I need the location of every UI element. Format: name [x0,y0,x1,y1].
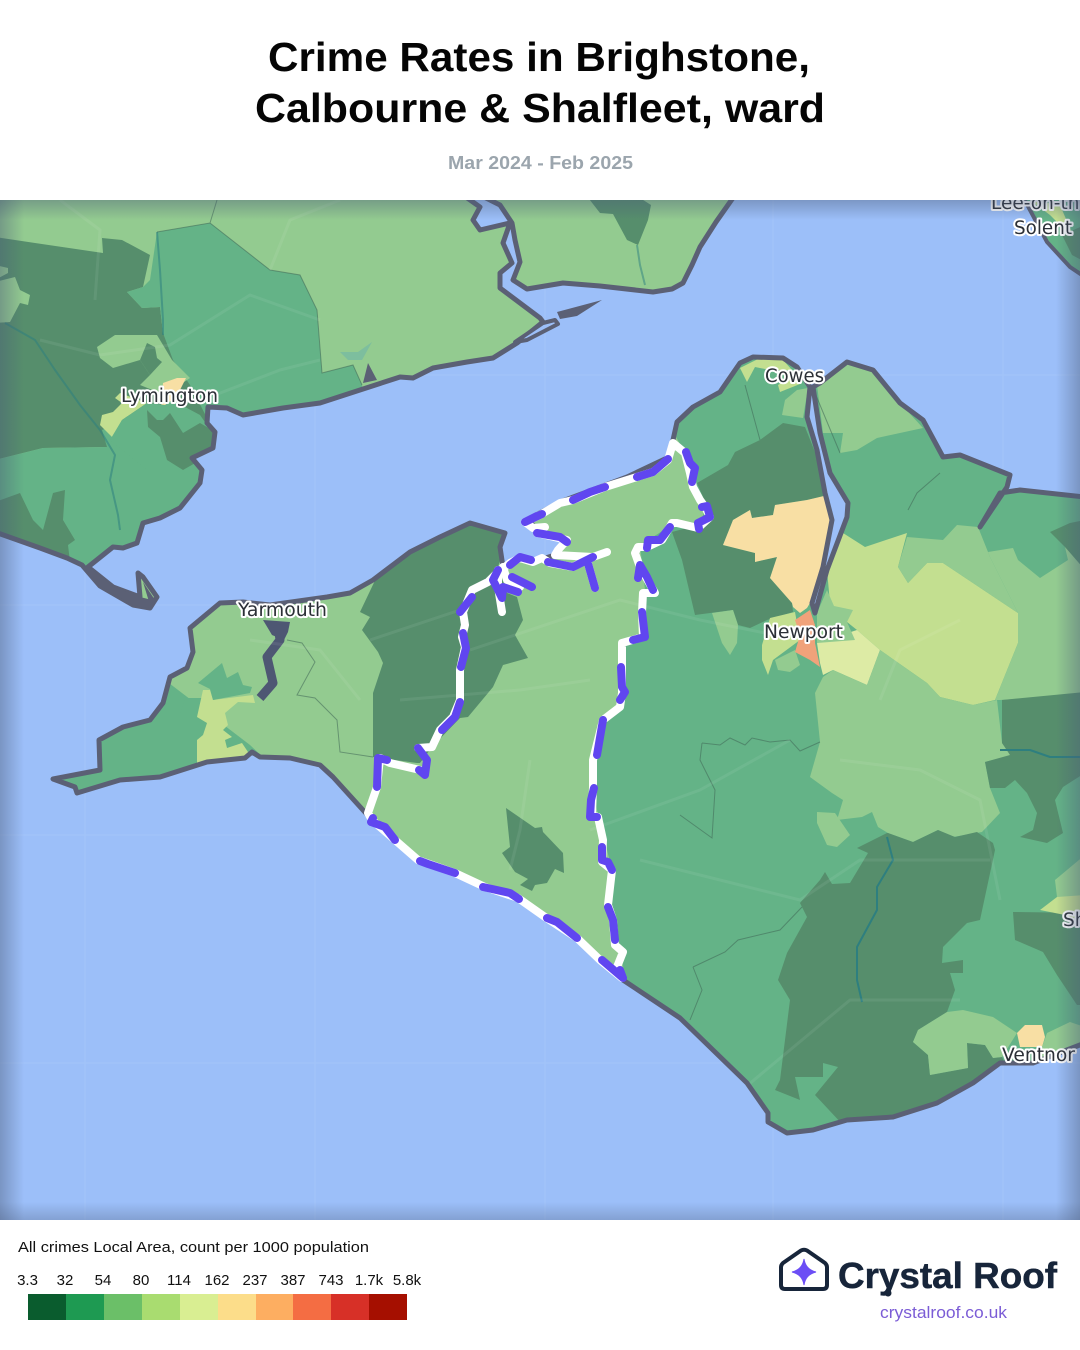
large light green south-east of Newport [810,650,1012,842]
spit and islet [143,300,602,605]
title [255,34,825,131]
Yarmouth estuary [260,620,290,698]
Hurst spit [94,575,150,606]
right light green [988,547,1080,700]
title: Crime Rates in Brighstone, [268,34,810,80]
ward outline: Brighstone, Calbourne & Shalfleet [368,443,710,978]
dark north of Newport [672,423,830,628]
legend [17,1239,422,1320]
map edge shading [0,200,1080,1220]
Newport light green [817,590,855,643]
light patch north of Lymington [97,335,190,395]
mid-green patch west [198,663,252,700]
lake [340,342,372,360]
place labels: Solent [1014,218,1072,239]
dark patch [590,200,651,245]
ward boundary lines [287,385,940,1020]
dark right region [1013,912,1080,1005]
dark patch top right [1050,521,1080,564]
place labels: Ventnor [1002,1045,1075,1066]
sea tile seams [0,200,1080,1220]
Lymington eastern mid-green region [127,223,365,420]
sea [0,200,1080,1220]
icon: house with star [781,1250,827,1289]
Cowes yellow-green [740,358,792,382]
dark patch south of Lymington [147,410,217,470]
legend values: 743 [318,1272,344,1289]
mainland east of Southampton Water [480,195,735,292]
website: crystalroof.co.uk [880,1304,1008,1322]
mid-green south-west region [0,429,200,566]
legend values: 162 [204,1272,230,1289]
legend title: All crimes Local Area, count per 1000 population [18,1239,369,1256]
place labels: Newport [764,622,843,643]
small dark region in ward [502,808,564,891]
New Forest dark region [0,238,205,458]
legend colour scale [28,1294,407,1320]
river in the south [857,750,1080,1002]
yellow-green Freshwater [197,690,255,766]
cream Newport north [723,495,835,613]
logo: Crystal Roof [781,1250,1058,1322]
light green near Cowes [782,388,808,418]
light NE of that [898,525,1018,613]
Lymington cream [161,378,186,405]
Ventnor cream [1017,1025,1045,1047]
boundary lines [157,200,362,385]
dark region: Parkhurst west [360,510,528,763]
legend values: 80 [133,1272,149,1289]
rivers [5,232,163,530]
pale south-east of Newport [817,630,880,685]
legend values: 387 [280,1272,306,1289]
legend values: 32 [57,1272,73,1289]
legend values: 54 [95,1272,111,1289]
map panel [0,193,1080,1220]
north-east mainland corner [1024,200,1080,276]
mid green Lymington south [112,401,208,437]
light east Cowes [817,360,923,453]
roads [250,600,1000,1100]
light green ward and west [165,435,705,1000]
legend values: 237 [242,1272,268,1289]
white boundary line [368,443,710,978]
legend values: 114 [167,1272,191,1289]
legend values: 5.8k [393,1272,422,1289]
subtitle: date range: Mar 2024 - Feb 2025 [448,153,633,173]
roads [40,252,320,395]
Shanklin yellow-green [1055,855,1080,900]
legend values: 1.7k [355,1272,384,1289]
Isle of Wight [40,357,1080,1133]
legend values: 3.3 [17,1272,38,1289]
wordmark: Crystal Roof [838,1255,1058,1296]
large dark south region [775,830,1008,1125]
dark east region [985,692,1080,843]
west end mid-green [188,698,202,706]
light patch far left [0,265,30,323]
light east of Ventnor [1040,1022,1080,1060]
Lymington yellow-green [100,393,147,437]
place labels [121,193,1080,1066]
light near Ventnor [913,1010,1017,1075]
mainland west of Southampton Water [0,195,543,608]
Newport yellow-green west [762,612,800,675]
light west of Newport [712,610,738,655]
place labels: Lymington [121,386,218,407]
legend values [17,1272,422,1289]
place labels: Cowes [765,366,824,387]
title: Calbourne & Shalfleet, ward [255,85,825,131]
purple dashed boundary segments [371,452,710,978]
dark patch by coast [0,490,75,562]
Newport salmon centre [795,610,820,667]
dark wedge [140,343,162,375]
yellow-green east of Newport [827,533,1018,705]
key dot on the y [884,1290,892,1296]
small light patch [817,812,850,847]
place labels: Yarmouth [237,600,327,621]
